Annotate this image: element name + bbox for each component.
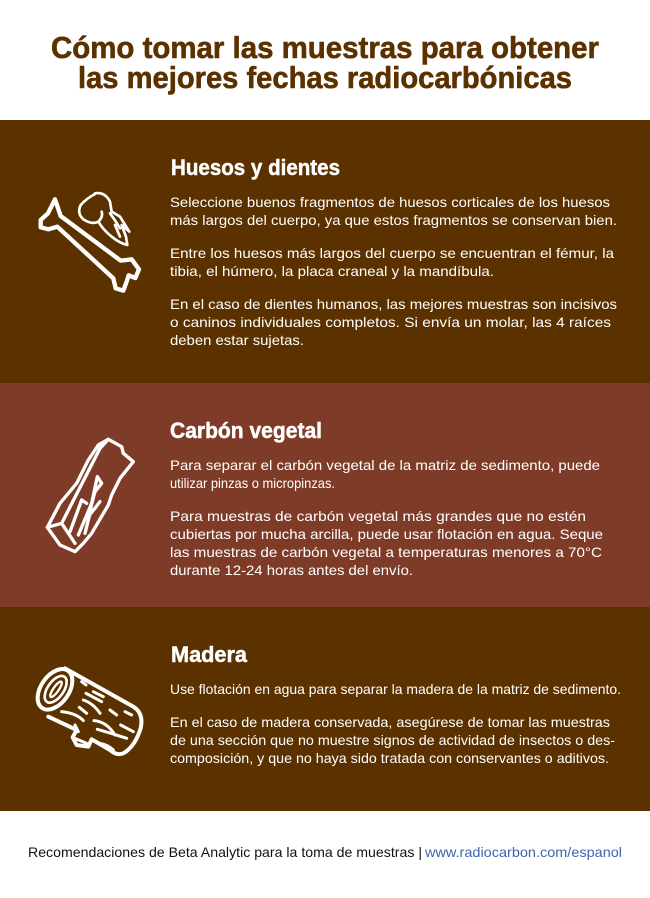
icon: bone and tooth bbox=[41, 193, 139, 291]
icon: charcoal bbox=[47, 439, 133, 552]
text block: Para separar el carbón vegetal de la matriz de sedimento, puede bbox=[170, 457, 600, 473]
heading: Carbón vegetal bbox=[170, 418, 322, 443]
text block: las muestras de carbón vegetal a temperaturas menores a 70°C bbox=[170, 544, 602, 560]
text block: tibia, el húmero, la placa craneal y la mandíbula. bbox=[170, 263, 494, 279]
text block: Seleccione buenos fragmentos de huesos corticales de los huesos bbox=[170, 194, 610, 210]
text block bbox=[170, 194, 617, 348]
text block: o caninos individuales completos. Si envía un molar, las 4 raíces bbox=[170, 314, 611, 330]
title: las mejores fechas radiocarbónicas bbox=[78, 60, 572, 95]
panel: huesos y dientes bbox=[0, 120, 650, 383]
panel: carbón vegetal bbox=[0, 383, 650, 607]
text block: durante 12-24 horas antes del envío. bbox=[170, 562, 413, 578]
heading: Madera bbox=[171, 642, 248, 667]
text block: Para muestras de carbón vegetal más grandes que no estén bbox=[170, 508, 586, 524]
text block: En el caso de dientes humanos, las mejores muestras son incisivos bbox=[170, 296, 617, 312]
footer text: www.radiocarbon.com/espanol bbox=[424, 844, 622, 860]
text block: Entre los huesos más largos del cuerpo se encuentran el fémur, la bbox=[170, 245, 614, 261]
text block: utilizar pinzas o micropinzas. bbox=[170, 475, 335, 491]
text block: de una sección que no muestre signos de actividad de insectos o des- bbox=[170, 732, 615, 748]
text block bbox=[170, 457, 603, 578]
text block: cubiertas por mucha arcilla, puede usar flotación en agua. Seque bbox=[170, 526, 603, 542]
text block: composición, y que no haya sido tratada con conservantes o aditivos. bbox=[170, 750, 609, 766]
text block bbox=[170, 681, 621, 766]
text block: En el caso de madera conservada, asegúrese de tomar las muestras bbox=[170, 714, 610, 730]
icon: log bbox=[31, 663, 141, 754]
text block: más largos del cuerpo, ya que estos fragmentos se conservan bien. bbox=[170, 212, 617, 228]
heading: Huesos y dientes bbox=[171, 155, 340, 180]
title bbox=[51, 30, 599, 95]
title: Cómo tomar las muestras para obtener bbox=[51, 30, 599, 65]
text block: Use flotación en agua para separar la madera de la matriz de sedimento. bbox=[170, 681, 621, 697]
panel: madera bbox=[0, 607, 650, 811]
text block: deben estar sujetas. bbox=[170, 332, 304, 348]
footer text: Recomendaciones de Beta Analytic para la toma de muestras | bbox=[28, 844, 422, 860]
footer text bbox=[28, 844, 622, 860]
